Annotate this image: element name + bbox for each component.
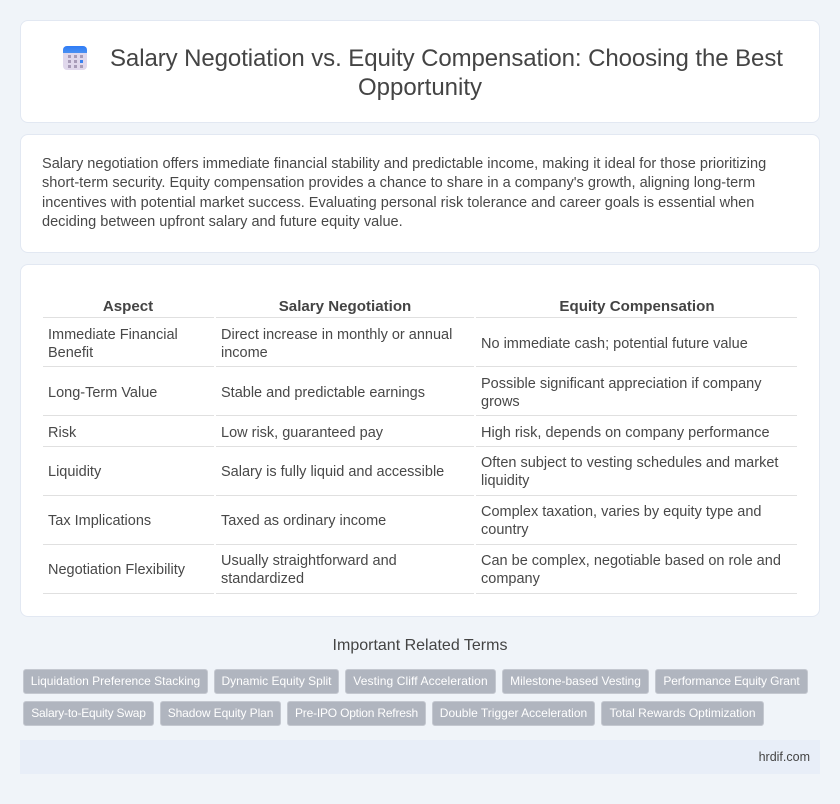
row: tax implications — [48, 504, 761, 538]
row: long-term value: grows — [481, 394, 520, 410]
icon: calendar — [63, 46, 87, 70]
text block: introduction: Salary negotiation offers immediate financial stability and predictable income, making it ideal for those prioritizing — [42, 156, 766, 172]
row: risk: Low risk, guaranteed pay — [221, 425, 383, 441]
row: negotiation flexibility: Negotiation Flexibility — [48, 562, 185, 578]
tag group: related terms: Dynamic Equity Split — [221, 674, 332, 688]
tag group: related terms: Vesting Cliff Acceleration — [353, 674, 488, 688]
row: tax implications: Complex taxation, varies by equity type and — [481, 504, 761, 520]
row: negotiation flexibility: Usually straightforward and — [221, 553, 397, 569]
row: immediate financial benefit: Benefit — [48, 345, 93, 361]
row: tax implications: Tax Implications — [48, 513, 151, 529]
tag group: related terms: Performance Equity Grant — [663, 674, 800, 688]
row: negotiation flexibility: Can be complex, negotiable based on role and — [481, 553, 781, 569]
row: long-term value: Possible significant appreciation if company — [481, 376, 761, 392]
tag group: related terms: Double Trigger Acceleration — [440, 706, 587, 720]
row: long-term value: Stable and predictable earnings — [221, 385, 425, 401]
text block: introduction: short-term security. Equity compensation provides a chance to share in a company's growth, aligning long-term — [42, 175, 755, 191]
table header — [103, 298, 715, 315]
tag group: related terms: Salary-to-Equity Swap — [31, 706, 146, 720]
row: liquidity: liquidity — [481, 473, 529, 489]
row: negotiation flexibility — [48, 553, 781, 587]
row: risk — [48, 425, 770, 441]
tag group: related terms: Total Rewards Optimization — [609, 706, 756, 720]
tag group: related terms — [23, 669, 808, 726]
tag group: related terms: Milestone-based Vesting — [510, 674, 641, 688]
row: tax implications: country — [481, 522, 529, 538]
row: risk: High risk, depends on company performance — [481, 425, 770, 441]
row: liquidity — [48, 455, 778, 489]
tag group: related terms: Shadow Equity Plan — [168, 706, 273, 720]
row: negotiation flexibility: standardized — [221, 571, 304, 587]
row: liquidity: Salary is fully liquid and accessible — [221, 464, 444, 480]
table header: Salary Negotiation — [279, 298, 411, 315]
row: immediate financial benefit: income — [221, 345, 268, 361]
panel: comparison table — [20, 264, 820, 617]
title: Opportunity — [358, 74, 482, 101]
row: liquidity: Often subject to vesting schedules and market — [481, 455, 778, 471]
row: long-term value: Long-Term Value — [48, 385, 157, 401]
row: immediate financial benefit: Immediate Financial — [48, 327, 178, 343]
table header: Equity Compensation — [559, 298, 715, 315]
row: immediate financial benefit: No immediate cash; potential future value — [481, 336, 748, 352]
tag group: related terms: Liquidation Preference Stacking — [31, 674, 200, 688]
row: long-term value — [48, 376, 762, 410]
row: risk: Risk — [48, 425, 76, 441]
row: immediate financial benefit: Direct increase in monthly or annual — [221, 327, 452, 343]
row: tax implications: Taxed as ordinary income — [221, 513, 386, 529]
tag group: related terms: Pre-IPO Option Refresh — [295, 706, 418, 720]
footer — [20, 740, 820, 774]
table header: Aspect — [103, 298, 153, 315]
title: Salary Negotiation vs. Equity Compensation: Choosing the Best — [110, 45, 783, 72]
text block: introduction: deciding between upfront salary and future equity value. — [42, 214, 403, 230]
title — [110, 45, 783, 101]
row: immediate financial benefit — [48, 327, 748, 361]
text block: introduction — [42, 156, 766, 230]
heading: related terms: Important Related Terms — [333, 637, 507, 654]
panel: introduction — [20, 134, 820, 253]
panel: title card — [20, 20, 820, 123]
row: liquidity: Liquidity — [48, 464, 101, 480]
footer text: hrdif.com — [759, 750, 810, 764]
row: negotiation flexibility: company — [481, 571, 540, 587]
text block: introduction: incentives with potential market success. Evaluating personal risk tolerance and career goals is essential when — [42, 195, 754, 211]
